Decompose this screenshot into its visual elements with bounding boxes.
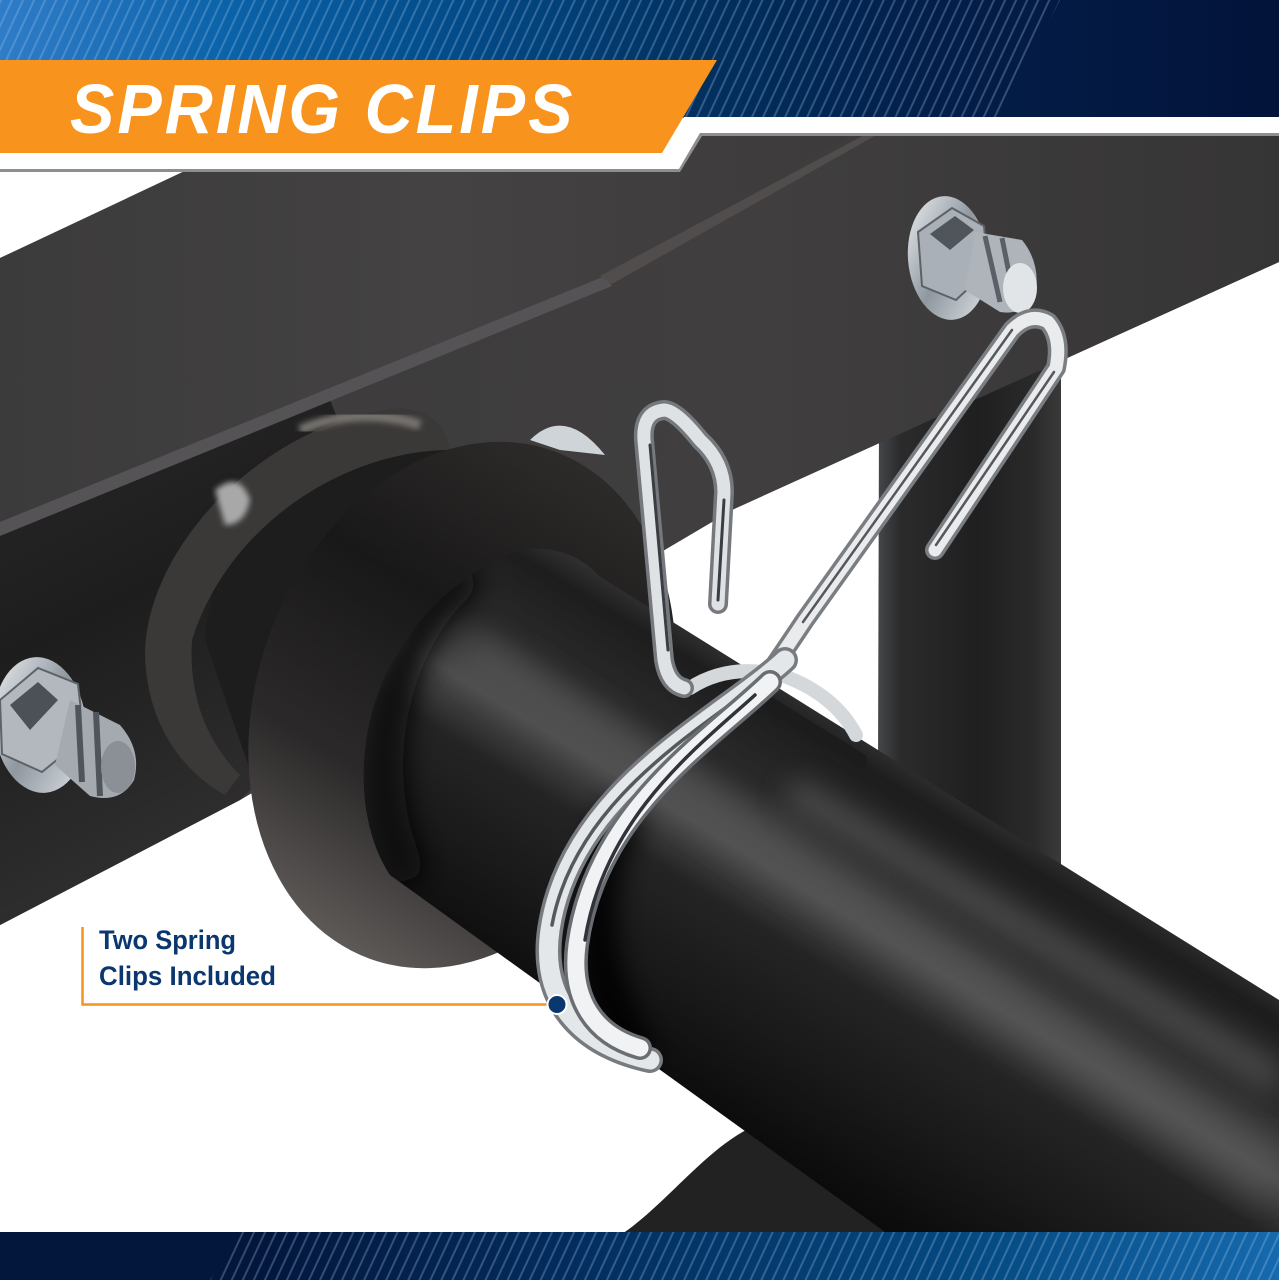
callout leader line <box>82 927 550 1004</box>
bolt: upper right <box>903 193 1037 323</box>
footer band <box>0 1232 1279 1280</box>
tube edge over back of ring <box>760 698 860 760</box>
main sleeve tube <box>364 548 1279 1232</box>
title: SPRING CLIPS <box>70 70 573 148</box>
front ring outer wire <box>548 660 785 1060</box>
rear vertical post <box>878 340 1061 880</box>
beam ledge highlight <box>0 276 612 536</box>
front ring inner wire <box>576 682 770 1048</box>
tube left shade <box>383 570 470 880</box>
bolt: lower left <box>0 653 136 798</box>
callout text: Two Spring <box>99 925 236 955</box>
back of ring <box>690 671 856 735</box>
header white underlay <box>0 117 1279 172</box>
beam front face <box>0 130 1279 925</box>
lower curved tube <box>622 1128 900 1234</box>
beam top face <box>0 125 870 522</box>
orange title banner <box>0 60 717 153</box>
clip shadow <box>597 810 640 1060</box>
small hook <box>644 410 724 688</box>
header background band <box>0 0 1279 118</box>
spring clip <box>548 318 1058 1060</box>
tube crest highlight <box>790 790 1279 1080</box>
callout text: Clips Included <box>99 961 276 991</box>
tube highlight band <box>470 650 1279 1180</box>
beam base fill <box>0 125 1279 925</box>
callout: two spring clips <box>82 925 566 1014</box>
beam upper crease <box>600 133 880 284</box>
round plate <box>177 381 747 1029</box>
long hook <box>770 318 1058 672</box>
collar neck <box>205 450 470 770</box>
weld ring <box>145 408 450 795</box>
beam lower left shade <box>0 400 420 925</box>
bolt behind plate <box>530 426 605 455</box>
callout marker dot <box>548 995 566 1014</box>
